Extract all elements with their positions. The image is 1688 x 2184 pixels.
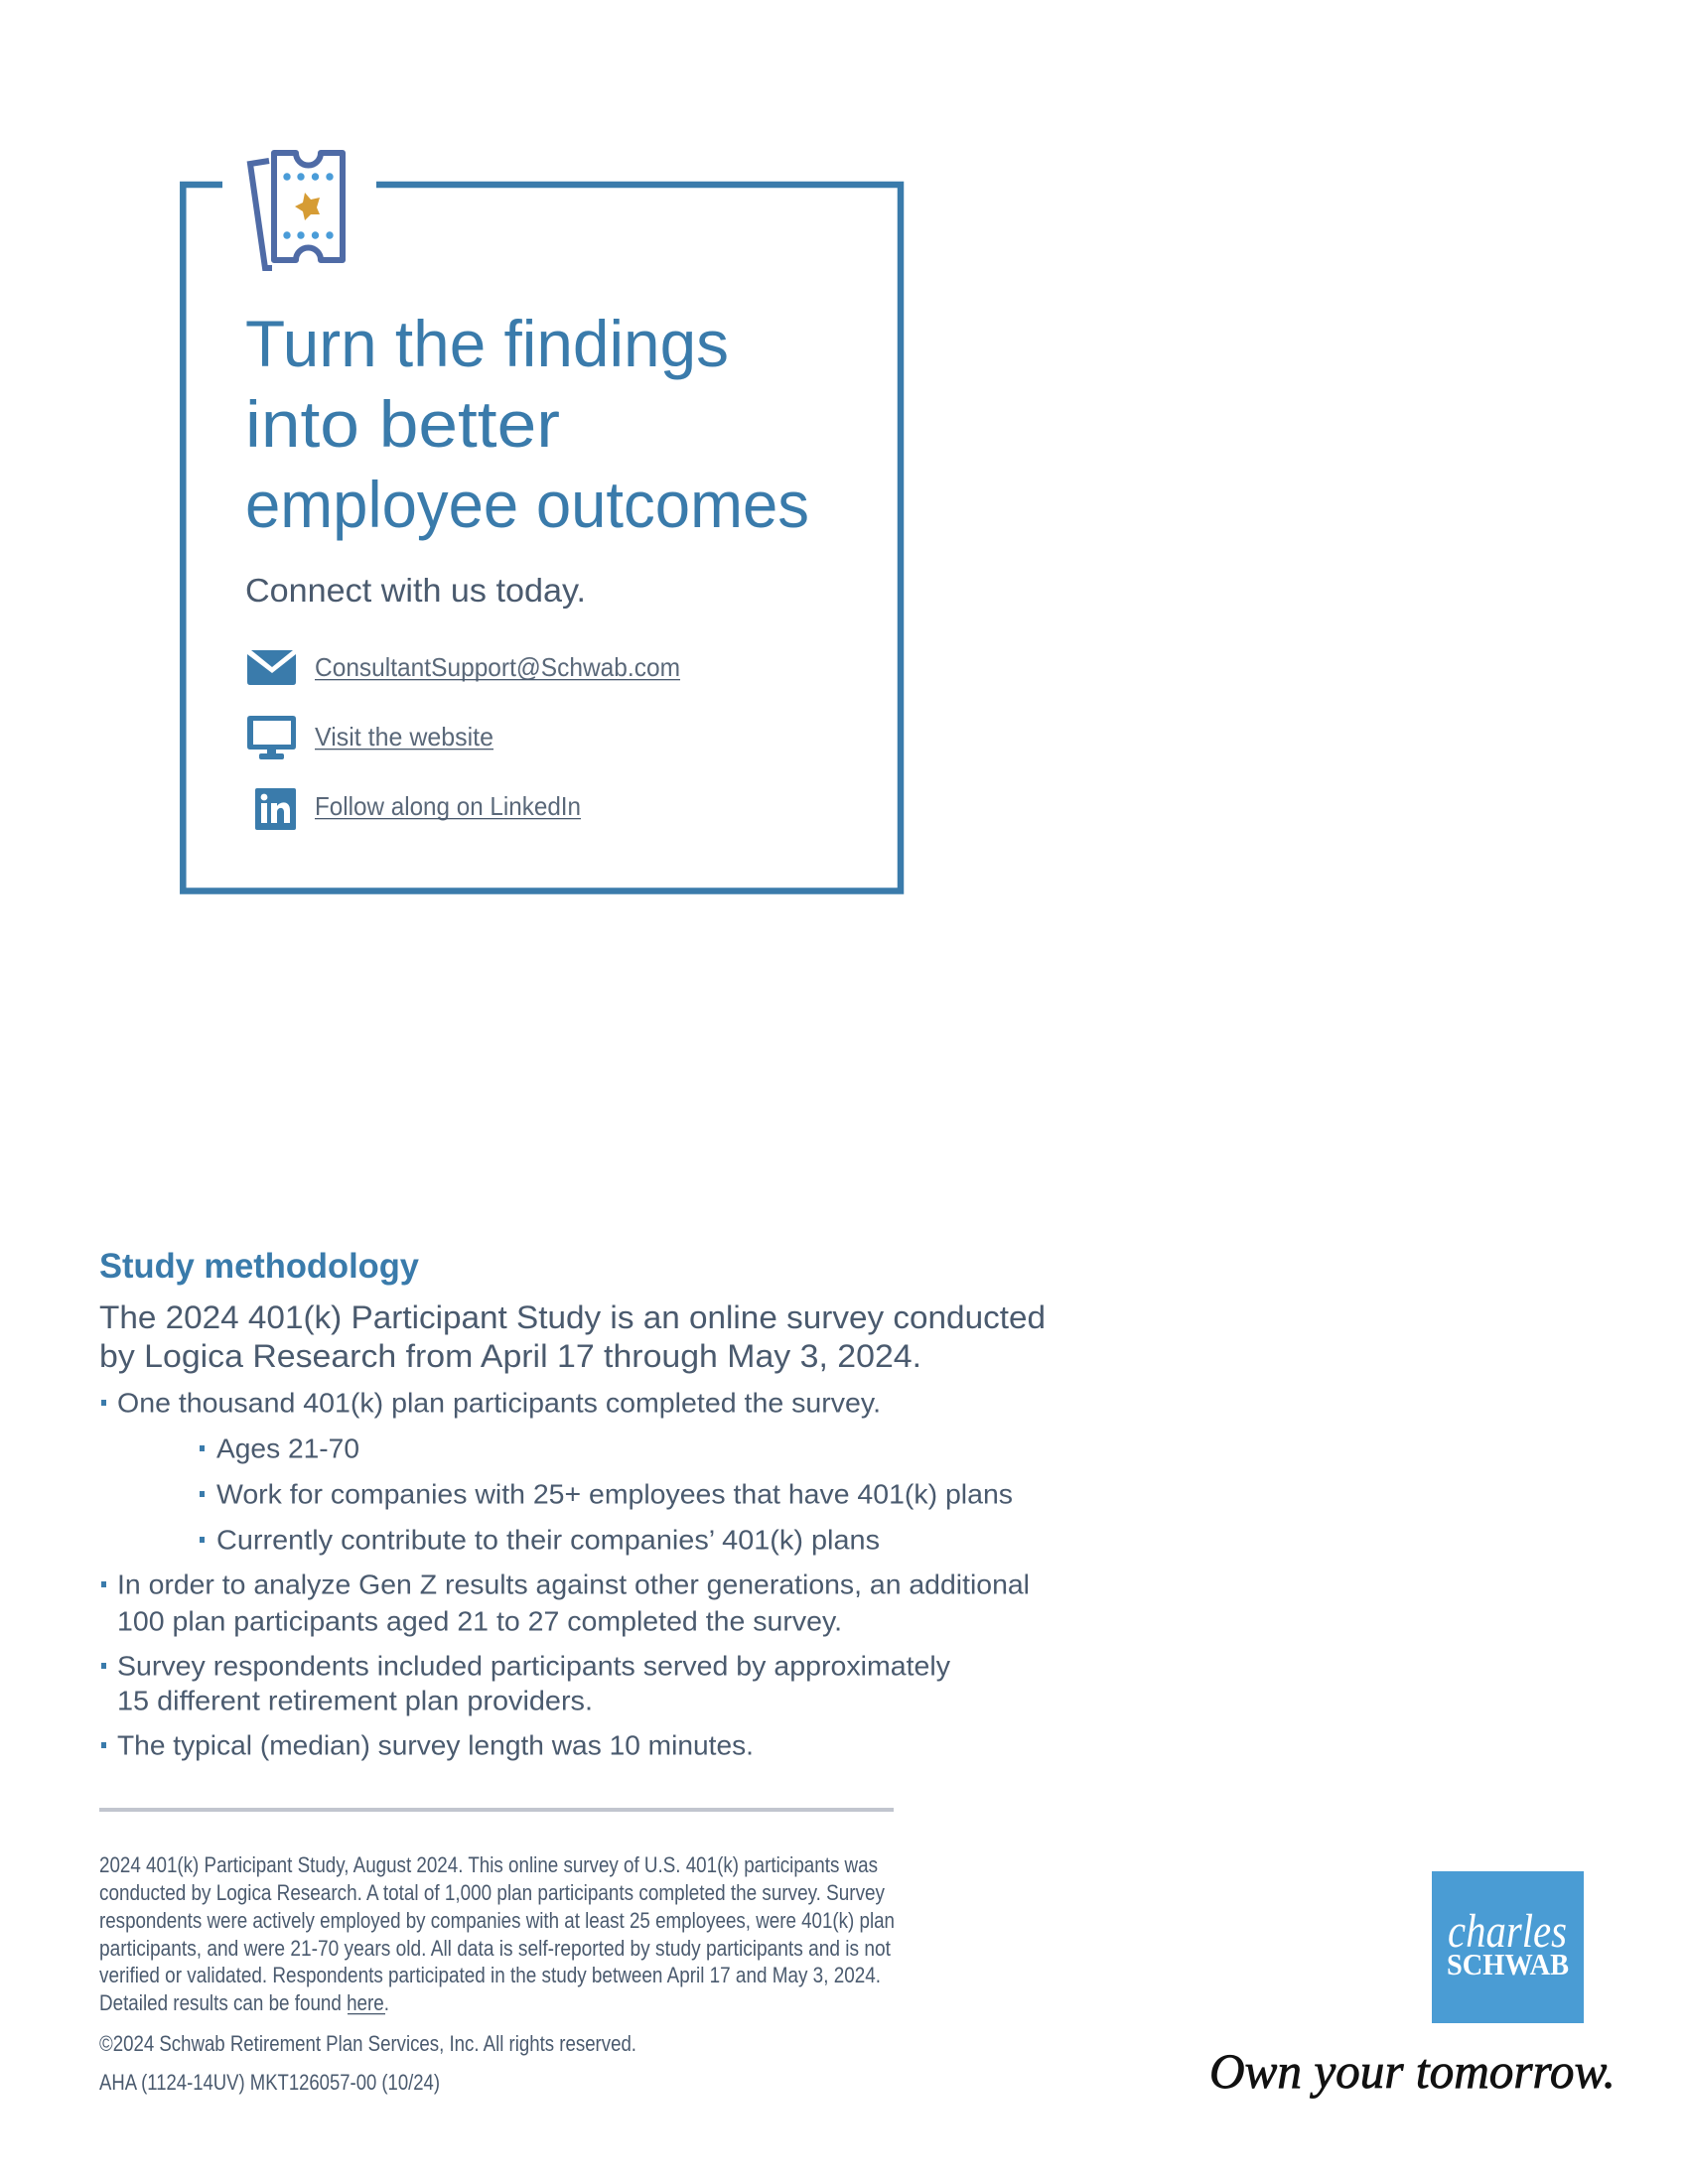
icon: tickets (250, 153, 343, 268)
bullet list: 15 different retirement plan providers. (117, 1686, 593, 1715)
panel: call to action (183, 153, 901, 891)
heading (245, 307, 809, 541)
logo: charles schwab (1432, 1871, 1584, 2023)
bullet list: In order to analyze Gen Z results against other generations, an additional (117, 1569, 1030, 1600)
icon: monitor (247, 716, 296, 759)
section: study methodology (99, 1247, 1046, 1761)
tagline: Own your tomorrow. (1209, 2043, 1616, 2099)
footnote: 2024 401(k) Participant Study, August 2024. This online survey of U.S. 401(k) participants was (99, 1852, 878, 1877)
heading: into better (245, 387, 560, 461)
logo: charles schwab: SCHWAB (1447, 1947, 1569, 1981)
logo: charles schwab: charles (1448, 1905, 1567, 1958)
heading: employee outcomes (245, 468, 809, 541)
document code: AHA (1124-14UV) MKT126057-00 (10/24) (99, 2070, 440, 2095)
bullet list (101, 1388, 1030, 1761)
link: email: ConsultantSupport@Schwab.com (315, 652, 680, 682)
bullet list: One thousand 401(k) plan participants completed the survey. (117, 1388, 881, 1418)
bullet list: Work for companies with 25+ employees that have 401(k) plans (216, 1479, 1013, 1509)
panel frame (183, 185, 901, 891)
intro paragraph: by Logica Research from April 17 through May 3, 2024. (99, 1338, 921, 1374)
footnote: respondents were actively employed by companies with at least 25 employees, were 401(k) plan (99, 1908, 895, 1933)
bullet list: Ages 21-70 (216, 1433, 359, 1463)
subheading: Connect with us today. (245, 572, 586, 609)
bullet list: The typical (median) survey length was 10 minutes. (117, 1729, 754, 1761)
intro paragraph: The 2024 401(k) Participant Study is an online survey conducted (99, 1299, 1046, 1335)
link: linkedin: Follow along on LinkedIn (315, 791, 581, 821)
intro paragraph (99, 1299, 1046, 1374)
bullet list: Currently contribute to their companies’ 401(k) plans (216, 1525, 880, 1555)
footnote: conducted by Logica Research. A total of 1,000 plan participants completed the survey. Survey (99, 1880, 885, 1905)
footnote: Detailed results can be found here. (99, 1990, 389, 2015)
copyright: ©2024 Schwab Retirement Plan Services, Inc. All rights reserved. (99, 2031, 636, 2056)
section heading: Study methodology (99, 1247, 420, 1286)
icon: linkedin (255, 788, 296, 830)
bullet list: Survey respondents included participants served by approximately (117, 1650, 950, 1682)
link: website: Visit the website (315, 722, 493, 751)
footnote: participants, and were 21-70 years old. All data is self-reported by study participants and is not (99, 1936, 891, 1961)
icon: envelope (247, 650, 296, 685)
footnote (99, 1852, 895, 2015)
footnote: verified or validated. Respondents participated in the study between April 17 and May 3, 2024. (99, 1963, 881, 1987)
heading: Turn the findings (245, 307, 729, 380)
bullet list: 100 plan participants aged 21 to 27 completed the survey. (117, 1606, 842, 1636)
